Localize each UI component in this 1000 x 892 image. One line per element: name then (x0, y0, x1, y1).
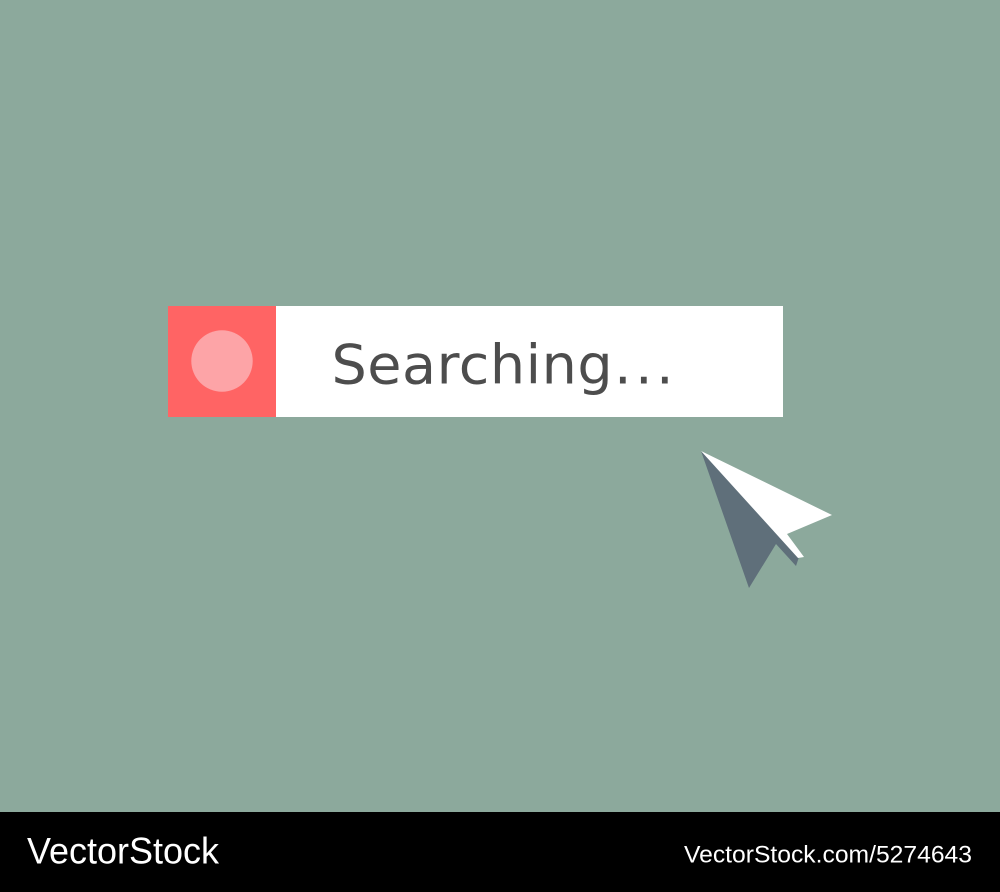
icon: paper plane cursor arrow (701, 451, 832, 588)
footer background (0, 812, 1000, 892)
arrow shadow side (701, 451, 799, 588)
search text: Searching (332, 333, 613, 396)
search text: ... (614, 333, 677, 396)
arrow white side (701, 451, 832, 558)
footer logo text: VectorStock (27, 830, 219, 872)
footer bar (0, 812, 1000, 892)
icon: button circle (191, 330, 253, 392)
search bar white field (276, 306, 783, 417)
footer image id text: VectorStock.com/5274643 (684, 842, 972, 869)
search bar (168, 306, 783, 417)
search bar red button (168, 306, 276, 417)
